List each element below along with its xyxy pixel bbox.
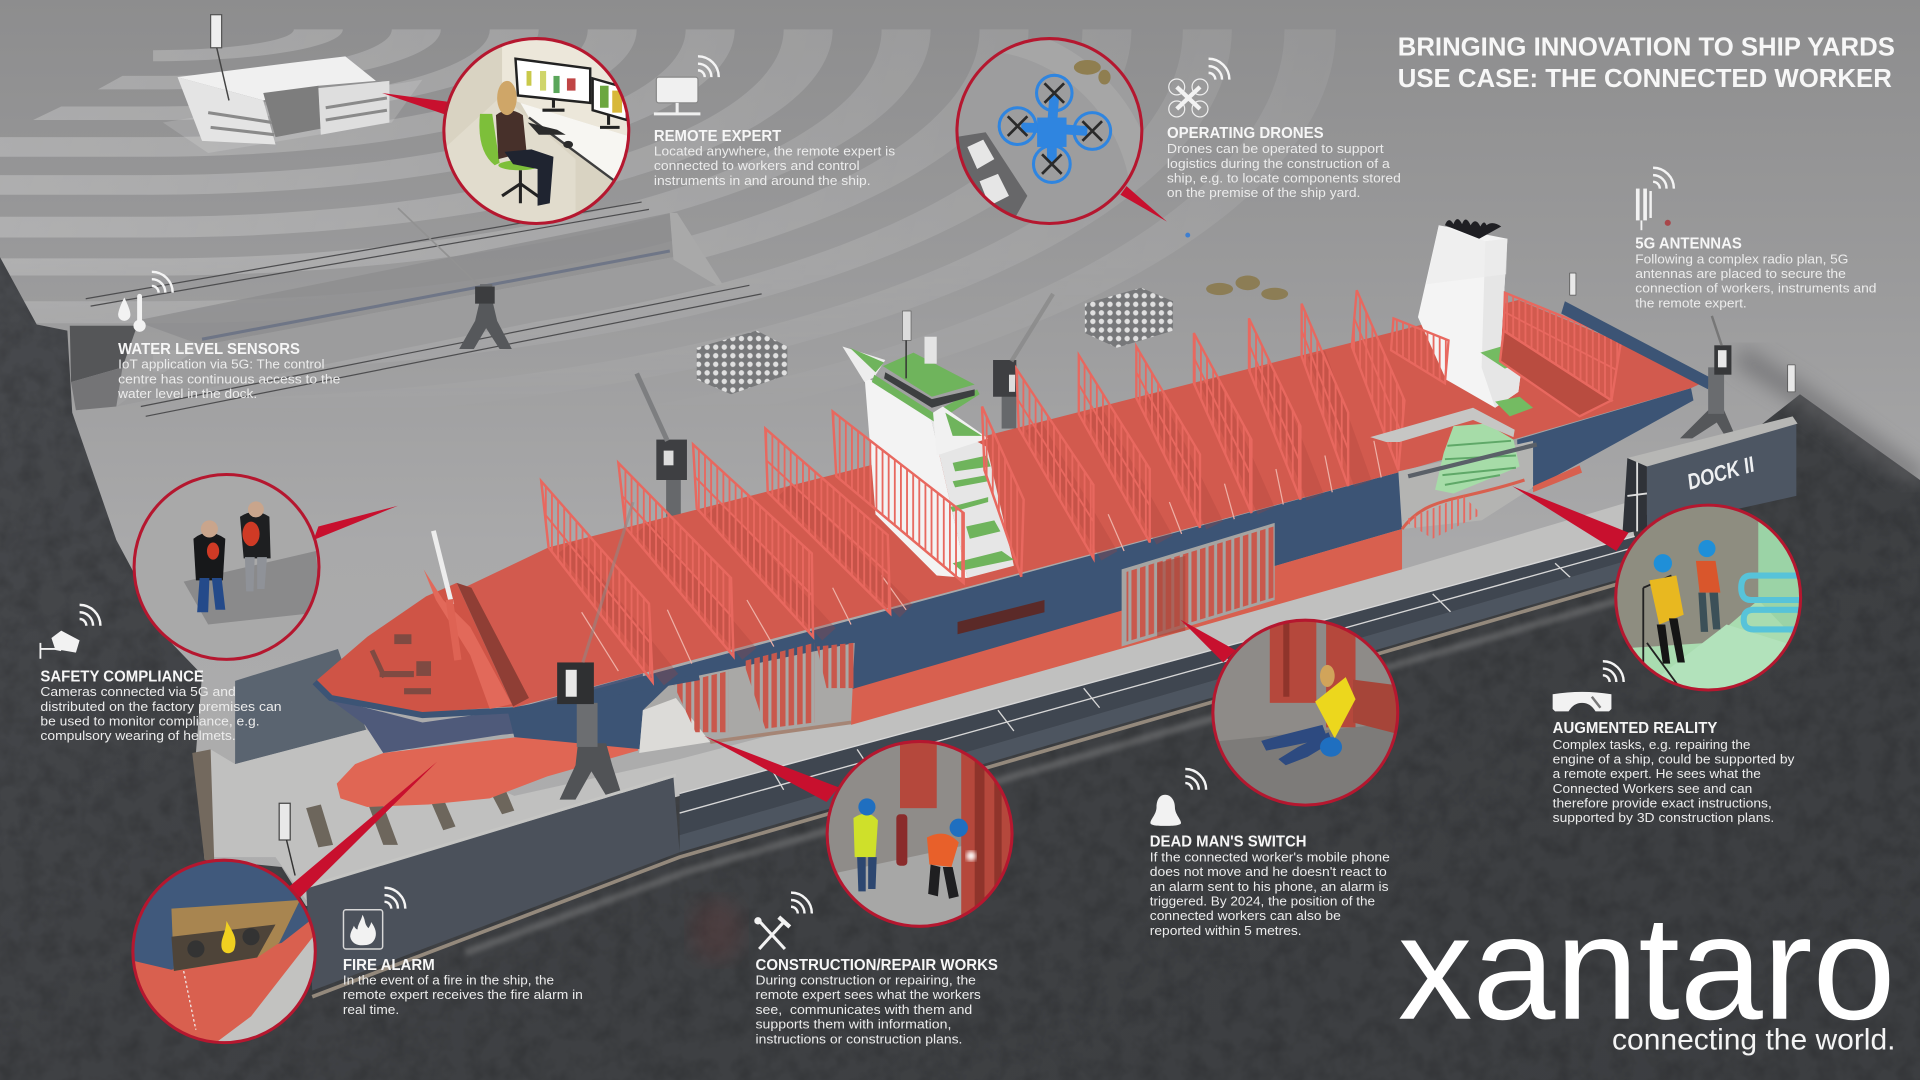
funnel exhaust pipes — [1445, 219, 1501, 239]
bow deck — [315, 583, 513, 713]
worker with orange vest — [1696, 561, 1720, 593]
augmented reality text: supported by 3D construction plans. — [1553, 810, 1774, 825]
hull slot — [958, 600, 1044, 634]
panel: dead man's switch — [1150, 617, 1401, 938]
icon: AR goggles — [1553, 661, 1624, 711]
foremast — [424, 530, 512, 709]
trench ribs — [680, 536, 1635, 813]
water level sensors text: IoT application via 5G: The control — [118, 357, 324, 372]
pit back wall — [135, 213, 673, 345]
port bridge wing — [842, 347, 885, 382]
panel: 5G antennas — [1635, 168, 1877, 310]
hatch cover lines — [582, 441, 1381, 671]
extinguisher — [896, 814, 907, 866]
augmented reality text: Complex tasks, e.g. repairing the — [1553, 737, 1750, 752]
curved hull cut line — [1402, 480, 1524, 529]
worker in yellow — [853, 814, 878, 857]
foam along wall — [465, 590, 1653, 953]
monitors — [516, 59, 590, 103]
construction text: CONSTRUCTION/REPAIR WORKS — [756, 957, 998, 974]
dead man's switch text: does not move and he doesn't react to — [1150, 864, 1387, 879]
construction text: supports them with information, — [756, 1017, 951, 1032]
icon: remote expert monitor — [654, 56, 719, 114]
fore hull: red bulb — [337, 722, 640, 807]
bridge deck band — [872, 375, 980, 422]
panel: fire alarm — [130, 857, 583, 1053]
panel: operating drones — [955, 37, 1401, 227]
inset photo: collapsed worker — [1210, 617, 1401, 808]
worker — [1315, 677, 1356, 738]
superstructure — [842, 311, 1014, 578]
bow rim — [315, 677, 699, 715]
construction text: During construction or repairing, the — [756, 972, 976, 987]
water level sensors text: WATER LEVEL SENSORS — [118, 341, 300, 358]
component racks — [697, 288, 1173, 394]
funnel — [1418, 219, 1533, 416]
pit floor — [116, 257, 716, 407]
worker in orange — [927, 834, 959, 867]
crane at stern — [1680, 316, 1736, 438]
panel: safety compliance — [40, 473, 322, 743]
side face — [931, 416, 1014, 578]
operating drones text — [1167, 125, 1401, 200]
dry dock pit — [70, 213, 722, 410]
fire alarm text: remote expert receives the fire alarm in — [343, 987, 583, 1002]
hatch cover shadows — [566, 354, 1363, 680]
wall foot ledge — [312, 576, 1647, 997]
dead man's switch text — [1150, 834, 1390, 938]
green engine — [1435, 424, 1520, 493]
railing — [1642, 574, 1678, 684]
augmented reality text — [1553, 720, 1795, 825]
construction text: instructions or construction plans. — [756, 1031, 962, 1046]
operating drones text: ship, e.g. to locate components stored — [1167, 170, 1401, 185]
front face — [864, 376, 967, 578]
fore hull: blue band — [328, 673, 643, 753]
stern antennas — [1570, 273, 1795, 392]
augmented reality text: AUGMENTED REALITY — [1553, 720, 1717, 737]
5G signal rings — [0, 30, 1232, 325]
icon: fire — [343, 888, 405, 949]
icon: bell — [1150, 769, 1206, 826]
person — [496, 110, 527, 159]
panel: construction and repair works — [754, 735, 1015, 1046]
inset photo: remote expert at desk — [441, 37, 632, 227]
bridge windows — [884, 372, 975, 408]
construction text: remote expert sees what the workers — [756, 987, 981, 1002]
5G antennas text: the remote expert. — [1635, 295, 1747, 310]
safety compliance text — [40, 668, 282, 743]
main deck — [467, 300, 1709, 708]
engine room opening — [1370, 408, 1537, 539]
title — [1398, 34, 1895, 93]
lower wall face — [680, 558, 1641, 852]
remote expert text: Located anywhere, the remote expert is — [654, 144, 895, 159]
fire alarm text — [343, 957, 583, 1017]
hull opening: forward section — [639, 643, 855, 753]
control centre building — [163, 15, 422, 153]
dead man's switch text: connected workers can also be — [1150, 908, 1341, 923]
icon: rooftop antenna — [211, 15, 229, 100]
remote expert text — [654, 128, 895, 188]
crane behind ship — [637, 373, 687, 517]
augmented reality text: Connected Workers see and can — [1553, 781, 1752, 796]
inset photo: construction workers — [824, 735, 1015, 929]
dock: far side wall — [235, 649, 366, 764]
pipe through engine room — [1408, 444, 1537, 476]
worker with yellow vest — [1649, 576, 1684, 624]
starboard bridge wing — [933, 407, 988, 456]
title: BRINGING INNOVATION TO SHIP YARDS — [1398, 34, 1895, 62]
safety compliance text: distributed on the factory premises can — [40, 699, 282, 714]
dock antenna — [279, 803, 295, 876]
dead man's switch text: an alarm sent to his phone, an alarm is — [1150, 879, 1389, 894]
title: USE CASE: THE CONNECTED WORKER — [1398, 65, 1892, 93]
chair — [479, 114, 500, 165]
operating drones text: on the premise of the ship yard. — [1167, 185, 1360, 200]
panel: augmented reality — [1553, 502, 1805, 825]
frame mid rails: aft section — [1018, 312, 1616, 522]
inset photo: drone — [955, 37, 1145, 227]
icon: security camera — [40, 605, 100, 659]
dock floor edge — [192, 749, 214, 863]
stepped green decks — [950, 456, 1014, 571]
augmented reality text: a remote expert. He sees what the — [1553, 766, 1761, 781]
icon: water drop and thermometer — [118, 272, 173, 332]
remote expert text: connected to workers and control — [654, 158, 860, 173]
5G antennas text — [1635, 236, 1877, 310]
shadow along the quay edge — [1739, 355, 1920, 480]
stern railing — [1561, 301, 1709, 389]
container ship — [315, 219, 1736, 807]
stacked drones on the ground — [1206, 276, 1288, 300]
inset photo: two workers — [132, 473, 322, 662]
safety compliance text: compulsory wearing of helmets. — [40, 728, 236, 743]
bow deck machinery — [370, 634, 431, 694]
dead man's switch text: DEAD MAN'S SWITCH — [1150, 834, 1307, 851]
crane on bow — [557, 502, 633, 800]
deck cargo frames: aft section — [1016, 290, 1621, 558]
rust stain on water — [689, 899, 743, 962]
construction text — [756, 957, 998, 1046]
fire alarm text: FIRE ALARM — [343, 957, 435, 974]
funnel green platforms — [1480, 347, 1524, 369]
blue pipes — [1741, 576, 1800, 629]
dock floor — [211, 502, 1635, 900]
pointers — [288, 93, 1629, 898]
bridge green roof — [883, 353, 975, 397]
5G antennas text: antennas are placed to secure the — [1635, 266, 1846, 281]
dock name: DOCK II — [1684, 451, 1758, 495]
dark pit corner — [70, 326, 137, 382]
fire alarm text: In the event of a fire in the ship, the — [343, 972, 554, 987]
water level sensors text: water level in the dock. — [117, 386, 257, 401]
remote expert text: REMOTE EXPERT — [654, 128, 782, 145]
augmented reality text: engine of a ship, could be supported by — [1553, 751, 1795, 766]
icon: 5G antenna — [1636, 168, 1674, 230]
small antenna marker — [1665, 220, 1671, 226]
icon: drone — [1169, 59, 1229, 117]
safety compliance text: be used to monitor compliance, e.g. — [40, 714, 260, 729]
operating drones text: Drones can be operated to support — [1167, 141, 1384, 156]
dock II near wall — [304, 536, 1653, 997]
logo tagline: connecting the world. — [1612, 1023, 1896, 1056]
xantaro logo: xantaro — [1398, 886, 1896, 1051]
desk — [520, 103, 627, 179]
stern hull — [1517, 388, 1693, 489]
mast and 5G antenna — [902, 311, 937, 378]
keyboard — [528, 122, 566, 135]
main wall — [306, 778, 680, 991]
hull side: blue band — [508, 471, 1402, 749]
frames in front of and behind superstructure — [833, 407, 1024, 583]
dock II end block — [1622, 416, 1798, 534]
deck cargo frames: forward section — [541, 429, 890, 682]
keel blocks — [306, 787, 514, 847]
panel: remote expert — [441, 37, 895, 227]
water level sensors text — [117, 341, 340, 401]
operating drones text: logistics during the construction of a — [1167, 156, 1391, 171]
crane on far dock — [398, 208, 512, 349]
dead man's switch text: triggered. By 2024, the position of the — [1150, 894, 1375, 909]
walkway over engine room — [1370, 408, 1515, 442]
panel: water level sensors — [117, 272, 340, 401]
hull opening: midship section — [1122, 523, 1275, 647]
augmented reality text: therefore provide exact instructions, — [1553, 796, 1772, 811]
dead man's switch text: reported within 5 metres. — [1150, 923, 1302, 938]
5G antennas text: Following a complex radio plan, 5G — [1635, 251, 1848, 266]
crane mid ship — [993, 294, 1053, 429]
operating drones text: OPERATING DRONES — [1167, 125, 1324, 142]
5G antennas text: 5G ANTENNAS — [1635, 236, 1742, 253]
dead man's switch text: If the connected worker's mobile phone — [1150, 849, 1390, 864]
safety compliance text: SAFETY COMPLIANCE — [40, 668, 204, 685]
inset photo: engine fire — [130, 857, 321, 1053]
forward block end face — [457, 583, 529, 707]
fire alarm text: real time. — [343, 1002, 399, 1017]
trench — [680, 536, 1635, 835]
5G antennas text: connection of workers, instruments and — [1635, 281, 1877, 296]
crane rails — [86, 202, 762, 416]
hull side: red lower hull — [851, 529, 1402, 725]
safety compliance text: Cameras connected via 5G and — [40, 684, 236, 699]
inset photo: workers in engine room — [1614, 502, 1805, 693]
remote expert text: instruments in and around the ship. — [654, 173, 871, 188]
frame mid rails: forward section — [545, 460, 889, 643]
small flying drone marker — [1185, 233, 1190, 238]
icon: crossed tools — [754, 893, 812, 949]
water level sensors text: centre has continuous access to the — [118, 371, 340, 386]
construction text: see, communicates with them and — [756, 1002, 972, 1017]
